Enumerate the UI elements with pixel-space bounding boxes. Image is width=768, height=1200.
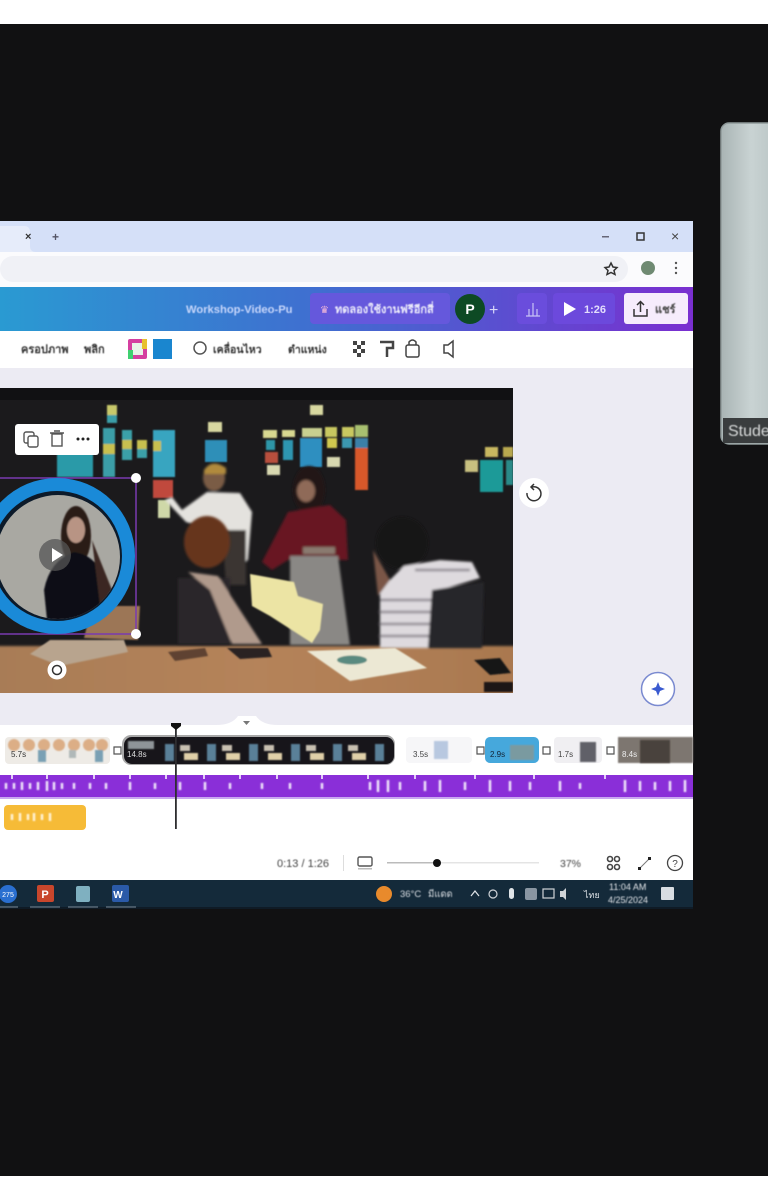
system tray xyxy=(376,882,674,905)
system tray: ไทย xyxy=(583,890,600,900)
editor toolbar xyxy=(0,331,693,368)
editor header bar: Workshop-Video-Pu xyxy=(186,304,293,316)
canvas workspace xyxy=(0,368,693,725)
element action popup xyxy=(15,424,99,455)
editor header bar: P xyxy=(465,301,475,317)
editor toolbar: เคลื่อนไหว xyxy=(213,341,262,356)
refresh comment button xyxy=(519,478,549,508)
circular video avatar xyxy=(0,478,135,634)
taskbar app icons: 275 xyxy=(2,892,14,899)
rotate handle xyxy=(48,660,66,680)
clip: selected meeting video xyxy=(122,735,395,765)
playback controls row xyxy=(277,855,682,871)
editor header bar xyxy=(0,287,693,331)
browser tab strip xyxy=(0,221,693,252)
editor header bar: ♛ xyxy=(320,305,329,316)
seated man in striped shirt xyxy=(373,517,484,648)
clip: group photo xyxy=(618,737,693,763)
address bar xyxy=(0,252,693,287)
editor toolbar: พลิก xyxy=(84,343,105,356)
taskbar app icons: W xyxy=(113,890,123,901)
editor header bar: + xyxy=(489,302,498,319)
timeline clip thumbnails xyxy=(5,735,693,765)
playhead xyxy=(171,723,181,829)
selection handles xyxy=(131,473,141,483)
windows taskbar xyxy=(0,880,693,909)
browser tab strip: × xyxy=(25,231,31,243)
participant tile: student xyxy=(721,123,768,444)
items on table xyxy=(30,606,513,692)
editor header bar: ทดลองใช้งานฟรีอีกสี่ xyxy=(335,301,434,316)
video frame: team meeting scene xyxy=(0,388,516,696)
clip: people: 1.7s xyxy=(558,750,573,759)
system tray: มีแดด xyxy=(428,888,453,900)
play button xyxy=(39,539,71,571)
taskbar app icons: P xyxy=(41,889,49,901)
table xyxy=(0,646,516,696)
system tray: 4/25/2024 xyxy=(608,895,648,905)
voiceover audio clip xyxy=(4,805,86,830)
clip: group photo: 8.4s xyxy=(622,750,637,759)
clip: light illustration: 3.5s xyxy=(413,750,428,759)
magic assistant button xyxy=(642,672,674,706)
system tray: 36°C xyxy=(400,889,421,900)
taskbar app icons xyxy=(0,885,136,907)
audio track xyxy=(0,775,693,799)
clip: illustrated faces: 5.7s xyxy=(11,750,26,759)
selection frame around avatar xyxy=(0,473,141,639)
papers held in hand xyxy=(250,574,323,643)
browser tab strip: + xyxy=(52,230,59,244)
clip: blue image: 2.9s xyxy=(490,750,505,759)
editor header bar: 1:26 xyxy=(584,304,606,316)
browser tab strip: × xyxy=(671,228,679,244)
editor header bar: แชร์ xyxy=(655,303,676,316)
clip: blue image xyxy=(485,737,539,763)
bottom page strip xyxy=(0,1176,768,1200)
clip: selected meeting video: 14.8s xyxy=(127,750,147,759)
seated woman with auburn hair xyxy=(178,516,262,644)
sticky notes on wall xyxy=(57,405,513,518)
woman in red sweater xyxy=(262,466,350,645)
playback controls row: ? xyxy=(672,859,678,870)
clip: light illustration xyxy=(406,737,472,763)
editor toolbar: ตำแหน่ง xyxy=(288,344,327,356)
system tray: 11:04 AM xyxy=(609,882,646,892)
clip: people xyxy=(554,737,602,763)
clip: illustrated faces xyxy=(5,737,110,764)
timeline area xyxy=(0,716,693,880)
shared browser window xyxy=(0,221,693,909)
presenter standing in white shirt xyxy=(165,463,252,585)
playback controls row: 37% xyxy=(560,858,581,870)
editor toolbar: ครอปภาพ xyxy=(21,343,69,356)
playback controls row: 0:13 / 1:26 xyxy=(277,858,329,870)
